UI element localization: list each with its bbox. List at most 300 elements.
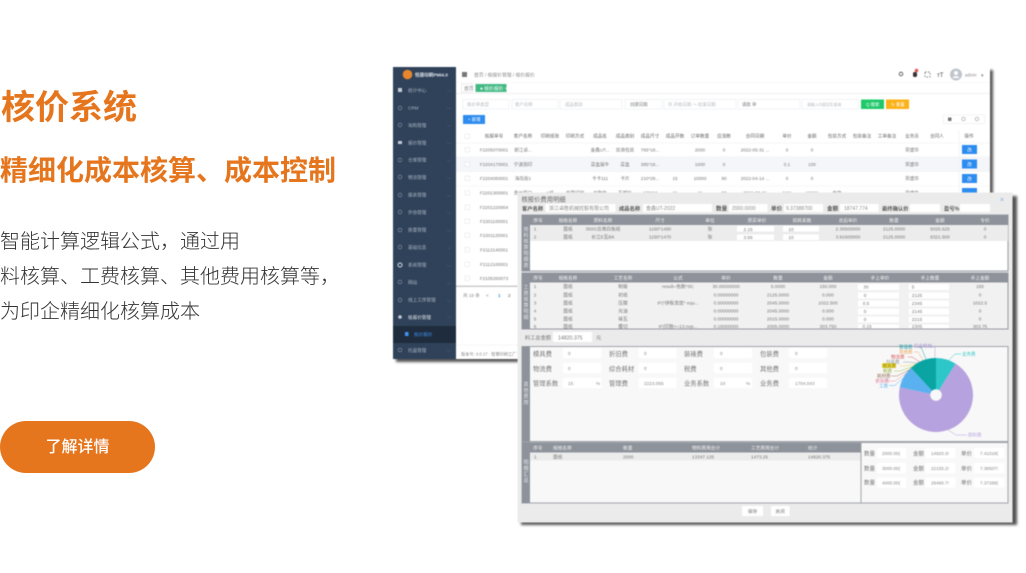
quote table: 核报单号	[485, 132, 504, 140]
table: labor cost: 3	[534, 300, 537, 306]
quote table: 11	[673, 190, 678, 196]
other costs fields: 业务系数	[684, 378, 710, 388]
other costs fields	[522, 346, 1008, 442]
other costs fields: 0	[720, 351, 723, 356]
button: learn more: 了解详情	[45, 439, 110, 456]
table: material cost: 3.91600000	[836, 234, 861, 240]
table: detail summary: 面纸	[553, 454, 563, 460]
table: labor cost: 0.00000000	[714, 308, 739, 314]
table: labor cost: 2145	[912, 309, 923, 314]
top navigation bar: ● 核价报价 ×	[480, 85, 508, 92]
table: material cost: 算	[523, 244, 529, 251]
quote table: 客户名称	[514, 132, 533, 140]
table: labor cost: 0.5	[863, 301, 870, 306]
sidebar menu: 仓库管理	[408, 157, 427, 164]
pie chart: cost breakdown: 管理费	[899, 344, 913, 350]
quote table: 0	[723, 148, 726, 152]
panel: quantity price tiers: 单价	[961, 450, 973, 458]
quote table: 新江卓...	[514, 146, 532, 154]
table: labor cost: 压膜	[618, 300, 628, 306]
search filter row: 客户名称	[515, 101, 533, 108]
pagination and footer: 共 19 条	[463, 292, 480, 299]
quote table: F2105260073	[480, 276, 509, 281]
table: labor cost: 面纸	[563, 283, 573, 290]
table: labor cost: 2045.0000	[767, 308, 789, 314]
modal header fields: 金鑫UT-2022	[646, 205, 675, 212]
quote table: 2022-03-31	[743, 190, 767, 196]
pie chart: cost breakdown: 业务费	[962, 350, 976, 358]
table: labor cost: 光油	[618, 308, 628, 314]
table: material cost: 0	[984, 226, 987, 232]
table: detail summary: 13347.125	[692, 454, 715, 460]
quote table: F2205070001	[480, 148, 509, 152]
top navigation bar: 首页 / 核报价管理 / 核价报价	[474, 72, 535, 78]
pie chart: cost breakdown: 综合耗材	[914, 342, 932, 350]
search filter row: + 新增	[468, 116, 481, 123]
description text	[0, 231, 340, 323]
table: material cost: 明	[523, 251, 529, 257]
sidebar menu: 询购管理	[408, 122, 427, 129]
table: material cost: 总后单价	[839, 217, 858, 224]
table: labor cost: 5	[912, 284, 915, 290]
modal header fields: 金额	[827, 204, 839, 212]
description text: 智能计算逻辑公式，通过用	[0, 231, 240, 253]
table: material cost: 10	[788, 235, 794, 240]
buttons: save and close: 保存	[748, 508, 757, 515]
table: material cost: 金额	[935, 217, 945, 224]
table: labor cost: 明	[523, 309, 529, 315]
table: detail summary: 明	[523, 460, 529, 466]
pie chart: cost breakdown: 物流费	[891, 354, 905, 360]
sidebar menu: 外协管理	[408, 209, 427, 216]
table: labor cost: 0	[864, 317, 867, 322]
table: labor cost: 算	[523, 302, 529, 309]
table: labor cost: 裱瓦	[618, 316, 628, 322]
pie chart: cost breakdown: 耗材费	[877, 372, 891, 380]
table: material cost: 单位	[705, 217, 715, 224]
other costs fields: 费	[523, 393, 529, 400]
panel: quantity price tiers: 数量	[864, 450, 876, 458]
panel: back window, quote list	[393, 67, 993, 362]
table: labor cost: 303.750	[820, 324, 837, 329]
table: material cost: 2125.0000	[883, 226, 905, 232]
table: detail summary: 统计	[808, 444, 818, 452]
table: labor cost: 工	[523, 285, 529, 291]
pie chart: cost breakdown: 包装费	[886, 358, 900, 365]
table: detail summary	[522, 442, 861, 503]
quote table: 贵州周口	[514, 190, 533, 196]
subtitle: 精细化成本核算、成本控制	[0, 155, 336, 186]
sidebar menu: CRM	[408, 106, 419, 110]
table: material cost: 原买单价	[748, 217, 767, 224]
quote table: 改	[967, 175, 972, 182]
sidebar menu: 基础信息	[408, 244, 427, 251]
table: labor cost: 金额	[823, 274, 833, 282]
quote table: 印刷纸张	[541, 132, 560, 140]
search filter row: 请款 单	[742, 101, 757, 108]
table: labor cost: 0.00000000	[714, 316, 739, 322]
top navigation bar: ▾	[981, 74, 984, 79]
other costs fields: 1704.043	[795, 381, 815, 386]
quote table: 0	[811, 176, 814, 181]
table: material cost: 尺寸	[655, 217, 665, 224]
other costs fields: 2223.056	[644, 381, 664, 386]
table: material cost: 1150*1470	[649, 234, 672, 240]
table: labor cost: result=色数*30;	[662, 283, 694, 290]
other costs fields: 0	[795, 366, 798, 371]
description text: 为印企精细化核算成本	[0, 301, 200, 323]
panel: quantity price tiers: 7.37268(	[980, 480, 999, 486]
panel: front modal, cost detail	[518, 192, 1017, 525]
table: material cost: 面纸	[563, 226, 573, 232]
other costs fields: 他	[523, 387, 529, 394]
total amount row: 14820.375	[558, 336, 583, 342]
table: detail summary: 1473.25	[751, 454, 768, 460]
table: material cost: 长江E瓦BK	[591, 234, 616, 240]
table: detail summary: 工艺费用合计	[751, 444, 779, 452]
quote table: 1000	[695, 162, 706, 167]
other costs fields: 管理系数	[533, 378, 559, 388]
quote table: 0	[786, 176, 789, 181]
modal header fields: 客户名称	[522, 204, 544, 212]
panel: quantity price tiers: 7.41018(	[980, 451, 999, 456]
pie chart: cost breakdown: 税费	[883, 368, 892, 374]
table: labor cost: 手上单价	[871, 274, 890, 282]
quote table: 单面印刷	[566, 190, 585, 196]
table: labor cost: 面纸	[563, 316, 573, 322]
table: labor cost: 30	[863, 284, 869, 290]
quote table: 包装备注	[853, 132, 872, 140]
table: material cost: 5025.625	[930, 226, 950, 232]
quote table: 385*18...	[641, 162, 659, 167]
quote table: 合同日期	[746, 132, 765, 140]
sidebar menu: 线上工序管理	[408, 296, 436, 304]
quote table: 应涨数	[717, 132, 731, 140]
table: labor cost: IF(*拼板宽度* equ...	[657, 300, 699, 306]
quote table: 文胸盒	[593, 190, 607, 196]
quote table: F2204060001	[480, 176, 509, 181]
sidebar menu: 核价报价	[414, 331, 433, 338]
table: labor cost: 费	[523, 290, 529, 297]
table: detail summary: 序号	[533, 444, 543, 452]
buttons: save and close	[742, 506, 790, 516]
quote table: F2201220004	[480, 205, 509, 210]
table: labor cost: 2005.0000	[767, 324, 789, 329]
panel: quantity price tiers: 数量	[864, 478, 876, 486]
table: detail summary: 总	[523, 477, 529, 484]
panel: quantity price tiers: 金额	[913, 464, 925, 472]
table: labor cost: 30.00000000	[712, 284, 740, 289]
other costs fields: 0	[720, 366, 723, 371]
table: labor cost: 公式	[673, 274, 683, 280]
quote table: 0	[811, 148, 814, 152]
search filter row	[463, 100, 984, 124]
quote table: 单价	[782, 132, 792, 140]
other costs fields: 管理费	[609, 378, 628, 388]
modal header fields: 成品名称	[619, 204, 641, 212]
quote table: 订单数量	[691, 132, 710, 140]
sidebar menu	[393, 67, 456, 359]
quote table: 菜盒	[620, 161, 630, 168]
search filter row: 请输入内容回车查询	[807, 102, 841, 107]
quote table: F2112140001	[480, 248, 508, 252]
sidebar menu: 质量管理	[408, 226, 427, 234]
pie chart: cost breakdown: 模具费	[882, 362, 896, 370]
table: material cost: 0	[984, 234, 987, 240]
buttons: save and close: 关闭	[775, 508, 785, 515]
pagination and footer: 2	[508, 293, 511, 298]
quote table: 菜盒展牛	[591, 161, 610, 168]
table: material cost: 表	[523, 262, 529, 269]
other costs fields: 折旧费	[609, 349, 628, 358]
quote table: 金鑫UT...	[591, 146, 609, 154]
table: labor cost: 规格名称	[559, 274, 578, 282]
other costs fields: 0	[644, 351, 647, 356]
table: detail summary: 物料费用合计	[692, 444, 720, 452]
description text: 料核算、工费核算、其他费用核算等，	[0, 266, 340, 288]
table: labor cost: 核	[523, 296, 529, 303]
quote table: 荣盛华	[905, 161, 919, 168]
quote table: 成品名	[593, 132, 607, 140]
table: labor cost: 初纸	[618, 292, 628, 298]
table: material cost: 3.56	[743, 235, 753, 240]
table: material cost: 序号	[533, 217, 543, 224]
table: labor cost: 2215	[912, 317, 923, 322]
table: material cost: 350G云南白板纸	[586, 226, 621, 232]
other costs fields: 物流费	[533, 364, 552, 373]
modal header fields: 单价	[771, 204, 783, 212]
quote table: 80	[721, 176, 727, 181]
sidebar menu: 核报价管理	[408, 314, 431, 321]
table: material cost: 面纸	[563, 234, 573, 240]
other costs fields: %	[596, 381, 600, 386]
top navigation bar: admin	[965, 72, 977, 78]
table: detail summary: 数量	[623, 444, 633, 452]
total amount row: 料工总金额	[525, 334, 552, 342]
quote table: 0	[723, 162, 726, 167]
other costs fields: 用	[523, 400, 529, 406]
other costs fields: 其	[523, 382, 529, 388]
table: detail summary: 细	[523, 465, 529, 472]
table: labor cost: 0	[979, 316, 982, 322]
table: labor cost: 2305	[912, 324, 923, 329]
search filter row: ▦ 开始日期 ～ 结束日期	[668, 101, 716, 108]
quote table: 成品类别	[616, 132, 635, 140]
table: labor cost: 4	[534, 308, 537, 314]
other costs fields: 业务费	[760, 378, 779, 388]
table: detail summary: 2000	[623, 454, 634, 460]
quote table: 0.1	[784, 162, 791, 167]
quote table: 余款	[832, 190, 842, 196]
table: material cost	[522, 215, 1008, 271]
modal header fields: 核报价费用明细	[522, 194, 566, 204]
table: labor cost: IF(印数>=13,nop...	[659, 323, 697, 330]
table: labor cost: 手上金额	[971, 274, 990, 282]
search filter row: Q 搜索	[866, 101, 880, 108]
panel: quantity price tiers: 3000.00(	[882, 466, 901, 471]
total amount row: 元	[596, 334, 601, 342]
search filter row: ↻ 重置	[891, 101, 905, 108]
quote table: 荣盛华	[905, 146, 919, 154]
table: detail summary: 汇	[523, 471, 529, 478]
table: material cost: 损耗系数	[793, 217, 812, 224]
other costs fields: 税费	[684, 364, 697, 373]
table: labor cost: 1022.5	[973, 300, 988, 306]
table: labor cost: 1022.500	[818, 300, 838, 306]
top navigation bar: тT	[937, 73, 944, 79]
table: labor cost: 面纸	[563, 292, 573, 298]
table: labor cost: 1	[534, 284, 537, 289]
quote table: 1111	[782, 190, 792, 196]
table: labor cost: 0	[864, 293, 867, 298]
sidebar menu: 托盘管理	[408, 347, 427, 354]
sidebar menu: 报表管理	[408, 192, 427, 198]
quote table: 改	[967, 161, 972, 168]
table: labor cost: 手上数量	[921, 274, 940, 282]
table: labor cost: 细	[523, 314, 529, 321]
quote table: 荣盛华	[905, 190, 919, 196]
table: labor cost: 5	[534, 316, 537, 322]
quote table: 金额	[807, 132, 817, 140]
table: material cost: 原料名称	[594, 217, 613, 224]
quote table: 卡片	[620, 175, 630, 182]
panel: quantity price tiers: 单价	[961, 464, 973, 472]
sidebar menu: 物流管理	[408, 174, 427, 181]
quote table: 瓦楞彩	[618, 190, 632, 196]
table: labor cost: 2125.0000	[767, 292, 789, 298]
quote table: 15	[672, 176, 678, 181]
table: labor cost: 0.000	[822, 292, 834, 298]
pagination and footer	[456, 292, 518, 358]
other costs fields: 包装费	[760, 349, 779, 358]
quote table: 工单备注	[878, 132, 897, 140]
quote table: 荣盛华	[905, 175, 919, 182]
other costs fields: 10	[720, 381, 726, 386]
quote table: F2201100001	[480, 219, 508, 224]
table: material cost: 2.15	[743, 227, 753, 232]
modal header fields: 最终确认价	[882, 204, 909, 212]
table: labor cost: 150.000	[820, 284, 837, 289]
other costs fields: 0	[568, 366, 571, 371]
table: labor cost: 面纸	[563, 323, 573, 330]
table: labor cost: 序号	[533, 274, 543, 282]
table: labor cost: 0.15000000	[714, 324, 739, 329]
table: labor cost: 数量	[773, 274, 783, 282]
table: labor cost: 0.50000000	[714, 300, 739, 306]
panel: quantity price tiers: 14820.3!	[931, 451, 949, 456]
quote table: 宁波围印	[514, 161, 533, 168]
panel: quantity price tiers: 4000.00(	[882, 480, 901, 486]
pie chart: cost breakdown: 工费	[879, 382, 888, 389]
sidebar menu: 网站	[408, 279, 418, 286]
table: material cost: 料	[523, 232, 529, 239]
quote table: 170*24	[643, 190, 658, 196]
top navigation bar	[456, 68, 990, 94]
quote table: 双滑包装	[616, 146, 635, 154]
table: labor cost: 0.15	[862, 324, 872, 329]
pagination and footer: <	[486, 293, 489, 298]
table: labor cost: 0	[979, 308, 982, 314]
other costs fields: %	[746, 381, 750, 386]
quote table: 包装方式	[828, 132, 847, 140]
pagination and footer: 1	[498, 293, 501, 298]
quote table: 2000	[695, 148, 706, 152]
panel: quantity price tiers: 金额	[913, 450, 925, 458]
table: labor cost: 2125	[912, 293, 923, 298]
panel: quantity price tiers: 22155.2!	[931, 466, 949, 471]
panel: quantity price tiers: 单价	[961, 478, 973, 486]
table: labor cost: 覆切	[618, 323, 628, 330]
quote table: 合同人	[930, 132, 944, 140]
other costs fields: 15	[568, 381, 574, 386]
table: labor cost: 0.000	[822, 316, 834, 322]
table: labor cost: 2	[534, 292, 537, 298]
quote table: 12221	[806, 190, 819, 196]
sidebar menu: 系统管理	[408, 262, 427, 268]
quote table: 0	[786, 148, 789, 152]
table: detail summary: 1	[534, 454, 537, 460]
search filter row: 核价单类型	[467, 101, 490, 108]
quote table: 50	[721, 190, 727, 196]
other costs fields: 模具费	[533, 349, 552, 358]
pagination and footer: 版本号: 4.0.17 · 智慧印刷工厂	[461, 350, 516, 358]
button: learn more	[0, 421, 155, 473]
table: material cost: 张	[708, 234, 713, 240]
table: material cost: 规格名称	[559, 217, 578, 224]
sidebar menu: 恒晟印刷PMI4.0	[415, 72, 448, 78]
table: labor cost: 工艺名称	[614, 274, 633, 282]
panel: quantity price tiers: 金额	[913, 478, 925, 486]
table: labor cost: 面纸	[563, 300, 573, 306]
quote table: 100	[808, 162, 816, 167]
table: detail summary: 14820.375	[808, 454, 831, 460]
table: labor cost: 0	[864, 309, 867, 314]
table: labor cost: 5.0000	[771, 284, 786, 289]
modal header fields: 浙江卓胜机械控股有限公司	[549, 205, 609, 212]
pie chart: cost breakdown: 折旧费	[876, 377, 889, 384]
panel: quantity price tiers: 2000.00(	[882, 451, 901, 456]
table: material cost: 2.36500000	[836, 226, 861, 232]
table: labor cost: 制版	[618, 283, 628, 290]
quote table: 印刷方式	[566, 132, 585, 140]
quote table: 2022-05-31 ...	[741, 148, 769, 152]
table: labor cost: 6	[534, 324, 537, 329]
table: labor cost: 0	[979, 292, 982, 298]
table: material cost: 令价	[980, 217, 990, 224]
table: material cost: 1	[534, 226, 537, 232]
table: labor cost: 150	[976, 284, 984, 289]
table: material cost: 用	[523, 227, 529, 233]
modal header fields: ×	[1000, 197, 1004, 204]
pie chart: cost breakdown	[876, 342, 982, 438]
table: material cost: 张	[708, 226, 713, 232]
table: material cost: 1160*1480	[649, 226, 672, 232]
modal header fields: 2000.0000	[732, 206, 756, 212]
panel: quantity price tiers: 29490.7!	[931, 480, 949, 486]
other costs fields: 其他费	[760, 364, 779, 373]
pie chart: cost breakdown: 其他费	[899, 348, 913, 356]
other costs fields: 0	[795, 351, 798, 356]
quote table: 改	[967, 146, 972, 153]
quote table: A纸	[546, 190, 554, 196]
modal header fields	[522, 194, 1004, 212]
table: material cost: 核	[523, 238, 529, 245]
table: material cost: 2	[534, 234, 537, 240]
quote table: F2204170001	[480, 162, 509, 167]
table: material cost: 数量	[889, 217, 899, 224]
other costs fields: 0	[644, 366, 647, 371]
panel: quantity price tiers	[861, 442, 1008, 503]
